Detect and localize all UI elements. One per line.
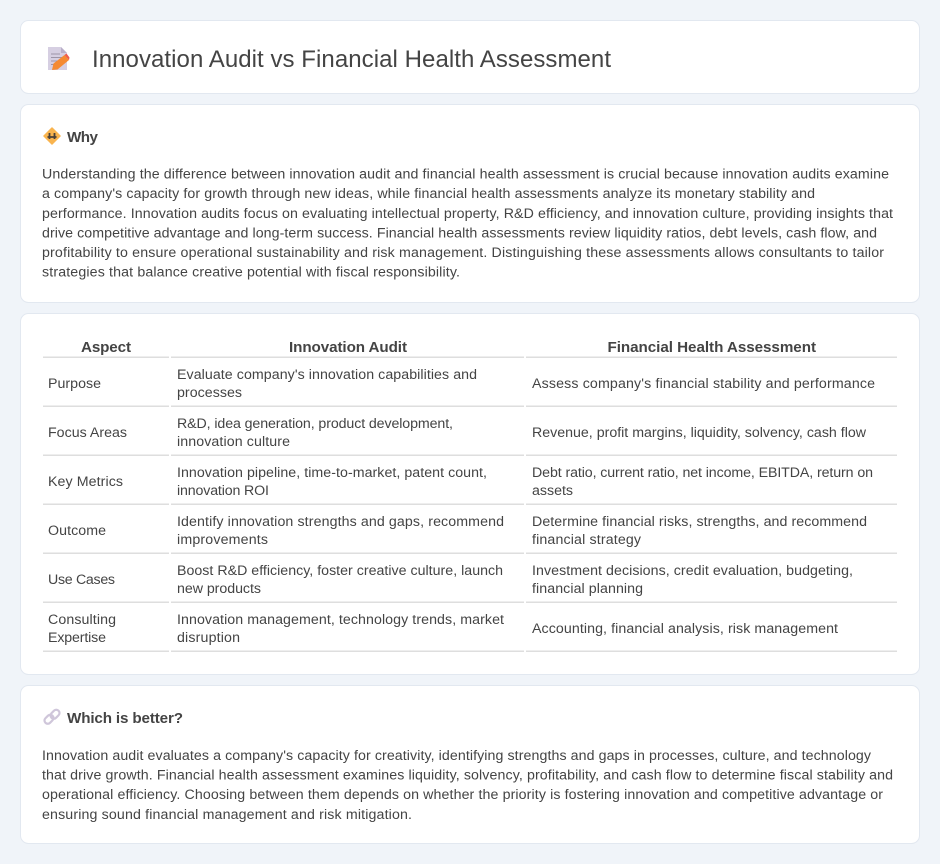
icon: document with pencil (48, 47, 70, 70)
table row: use cases: Boost R&D efficiency, foster creative culture, launch (177, 563, 503, 579)
table header row: Aspect (81, 339, 131, 356)
text block: why paragraph: drive competitive advantage and long-term success. Financial health assessments review liquidity ratios, debt levels, cash flow, and (42, 225, 877, 241)
table row: key metrics: Key Metrics (48, 474, 123, 490)
title: Innovation Audit vs Financial Health Assessment (92, 46, 611, 73)
table row: purpose: processes (177, 385, 242, 401)
table row: use cases (43, 563, 897, 603)
table row: use cases: Investment decisions, credit evaluation, budgeting, (532, 563, 853, 579)
table row: consulting expertise (43, 612, 897, 652)
table row: consulting expertise: Expertise (48, 630, 106, 646)
text block: which is better paragraph: operational efficiency. Choosing between them depends on whether the priority is fostering innovation and competitive advantage or (42, 787, 883, 803)
table row: key metrics: assets (532, 483, 573, 499)
table row: consulting expertise: Consulting (48, 612, 116, 628)
table row: focus areas (43, 416, 897, 456)
heading: which is better: Which is better? (67, 710, 183, 727)
text block: which is better paragraph (42, 748, 893, 823)
heading: why: Why (67, 129, 99, 146)
table row: key metrics (43, 465, 897, 505)
table row: focus areas: Focus Areas (48, 425, 127, 441)
table header row: Innovation Audit (289, 339, 407, 356)
text block: why paragraph: strategies that balance creative potential with fiscal responsibility. (42, 265, 460, 281)
text block: which is better paragraph: Innovation audit evaluates a company's capacity for creativity, identifying strengths and gaps in processes, culture, and technology (42, 748, 872, 764)
panel: comparison table (20, 314, 920, 674)
table row: key metrics: Debt ratio, current ratio, net income, EBITDA, return on (532, 465, 873, 481)
table row: outcome: Identify innovation strengths and gaps, recommend (177, 514, 504, 530)
table row: use cases: new products (177, 581, 261, 597)
table row: purpose: Assess company's financial stability and performance (532, 376, 875, 392)
table row: outcome: financial strategy (532, 532, 642, 548)
text block: why paragraph: Understanding the difference between innovation audit and financial health assessment is crucial because innovation audits examine (42, 167, 889, 183)
table row: outcome: Outcome (48, 523, 106, 539)
table row: outcome: Determine financial risks, strengths, and recommend (532, 514, 867, 530)
table row: purpose: Evaluate company's innovation capabilities and (177, 367, 477, 383)
table row: focus areas: R&D, idea generation, product development, (177, 416, 453, 432)
text block: why paragraph: profitability to ensure operational sustainability and risk management. Distinguishing these assessments allows consultants to tailor (42, 245, 884, 261)
table row: purpose (43, 367, 897, 407)
text block: why paragraph (42, 167, 893, 281)
table row: focus areas: Revenue, profit margins, liquidity, solvency, cash flow (532, 425, 867, 441)
text block: why paragraph: a company's capacity for growth through new ideas, while financial health assessments analyze its monetary stability and (42, 186, 815, 202)
table row: key metrics: innovation ROI (177, 483, 269, 499)
table header row (43, 339, 897, 358)
text block: which is better paragraph: that drive growth. Financial health assessment examines liquidity, solvency, profitability, and cash flow to determine fiscal stability and (42, 768, 893, 784)
table row: consulting expertise: disruption (177, 630, 240, 646)
table row: consulting expertise: Innovation management, technology trends, market (177, 612, 504, 628)
icon: warning diamond (44, 128, 60, 144)
table row: key metrics: Innovation pipeline, time-to-market, patent count, (177, 465, 487, 481)
panel: why (20, 104, 920, 302)
table row: focus areas: innovation culture (177, 434, 290, 450)
table row: outcome (43, 514, 897, 554)
icon: chain link (43, 708, 61, 725)
table row: consulting expertise: Accounting, financial analysis, risk management (532, 621, 838, 637)
table row: outcome: improvements (177, 532, 268, 548)
table row: use cases: financial planning (532, 581, 643, 597)
text block: which is better paragraph: ensuring sound financial management and risk mitigation. (42, 807, 412, 823)
table row: purpose: Purpose (48, 376, 101, 392)
text block: why paragraph: performance. Innovation audits focus on evaluating intellectual property, R&D efficiency, and innovation culture, providing insights that (42, 206, 893, 222)
panel: page title (20, 20, 920, 94)
table row: use cases: Use Cases (48, 572, 115, 588)
panel: which is better (20, 686, 920, 844)
table header row: Financial Health Assessment (608, 339, 816, 356)
